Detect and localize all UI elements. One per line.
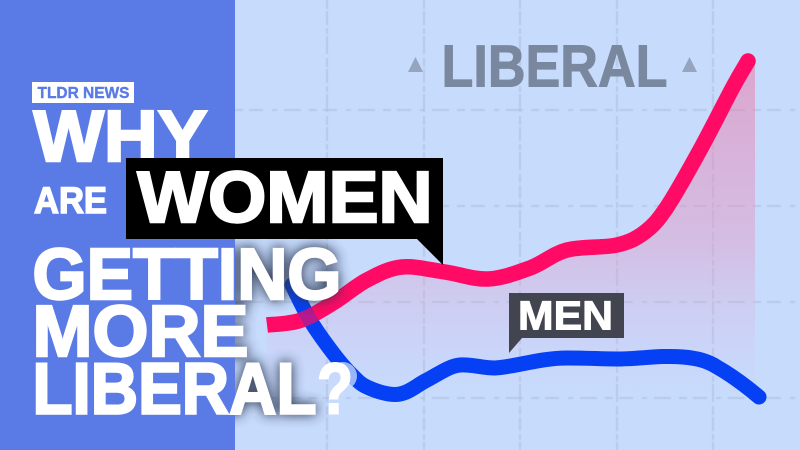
men line (292, 285, 759, 397)
title shadow on chart: GETTING (32, 234, 342, 314)
title shadow on chart: MORE (32, 292, 248, 372)
women text: WOMEN (138, 158, 432, 238)
line chart: women and men (267, 53, 759, 397)
area between lines (267, 61, 755, 395)
women line end cap (740, 53, 756, 69)
title word: why: WHY (34, 97, 208, 177)
axis label: liberal (408, 34, 697, 100)
title word: liberal: LIBERAL (32, 349, 316, 429)
title word: getting: GETTING (32, 235, 342, 315)
title question mark: ? (317, 349, 353, 429)
title word: more: MORE (32, 292, 248, 372)
title (32, 97, 443, 429)
badge box (32, 82, 134, 103)
axis heading: LIBERAL (442, 34, 668, 100)
title word: are: ARE (34, 180, 107, 221)
women callout (126, 158, 443, 265)
label: men (509, 292, 624, 353)
men callout box (509, 293, 624, 353)
men text: MEN (518, 292, 613, 338)
icon: right up triangle (682, 57, 697, 72)
left blue panel (0, 0, 235, 450)
title shadow on chart: LIBERAL (32, 349, 316, 429)
women callout box (126, 158, 443, 265)
question mark highlight (340, 362, 357, 386)
badge text: TLDR NEWS (38, 85, 130, 102)
icon: left up triangle (408, 57, 423, 72)
title shadow on chart (235, 239, 350, 425)
women line (267, 61, 748, 325)
brand badge (32, 82, 134, 103)
line crossing overlap (296, 306, 322, 334)
